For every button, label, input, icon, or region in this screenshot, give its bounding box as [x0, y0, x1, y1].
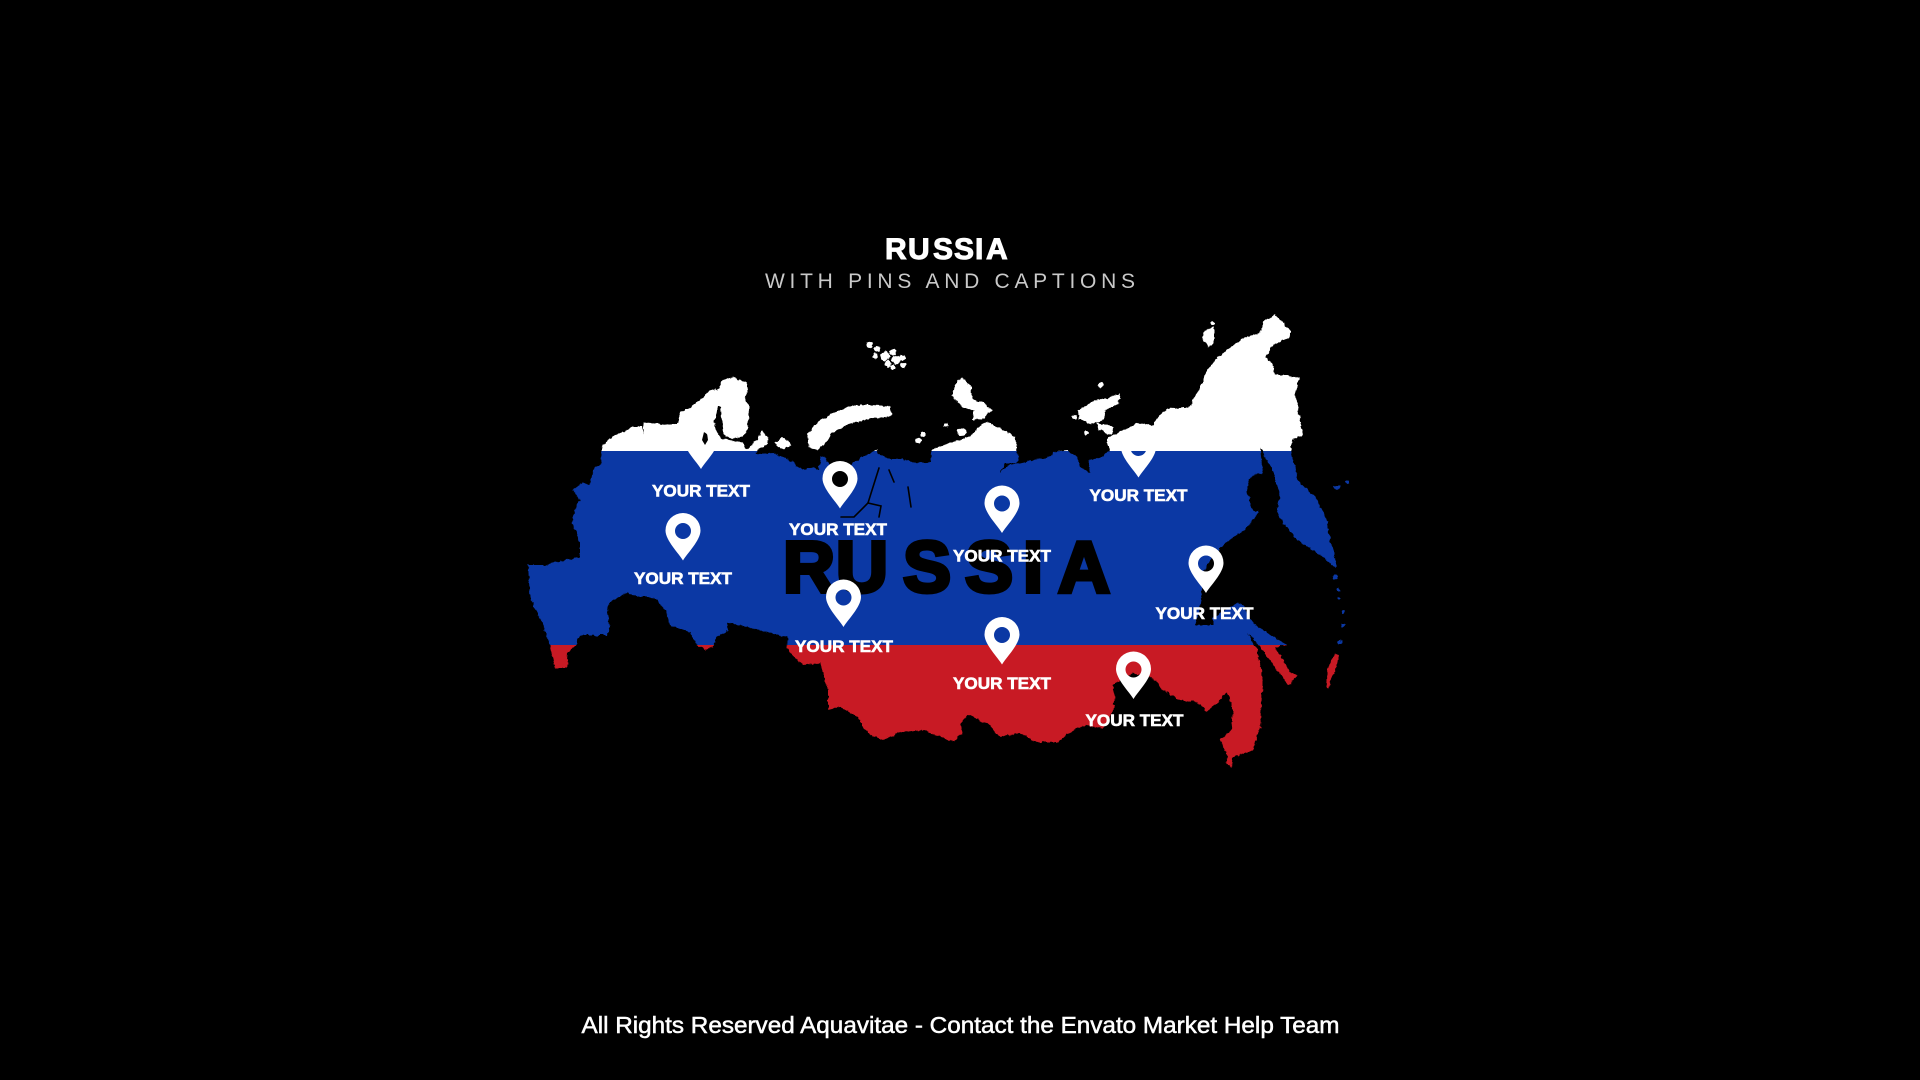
pin and caption 9	[1086, 652, 1184, 730]
pin and caption 1	[652, 422, 751, 500]
pin and caption 3: YOUR TEXT	[634, 569, 733, 588]
pin and caption 5: YOUR TEXT	[953, 546, 1052, 566]
pin and caption 6	[1090, 430, 1188, 505]
pin and caption 2	[789, 461, 888, 539]
pin and caption 8: YOUR TEXT	[953, 674, 1052, 693]
pin and caption 4	[795, 580, 894, 656]
pin and caption 1: YOUR TEXT	[652, 482, 751, 500]
pin and caption 3	[634, 513, 733, 588]
pin and caption 7	[1156, 546, 1254, 623]
pin and caption 2: YOUR TEXT	[789, 520, 888, 539]
map: Russia filled with flag stripes	[527, 314, 1350, 768]
pin and caption 7: YOUR TEXT	[1156, 604, 1254, 623]
pin and caption 8	[953, 617, 1052, 693]
subtitle: WITH PINS AND CAPTIONS	[765, 270, 1135, 293]
pin and caption 5	[953, 486, 1052, 566]
pin and caption 4: YOUR TEXT	[795, 637, 894, 656]
title: RUSSIA	[885, 233, 1008, 266]
pin and caption 6: YOUR TEXT	[1090, 486, 1188, 505]
footer credit: All Rights Reserved Aquavitae - Contact the Envato Market Help Team	[582, 1012, 1340, 1038]
large label: RUSSIA: RUSSIA	[783, 528, 1110, 608]
pin and caption 9: YOUR TEXT	[1086, 711, 1184, 730]
